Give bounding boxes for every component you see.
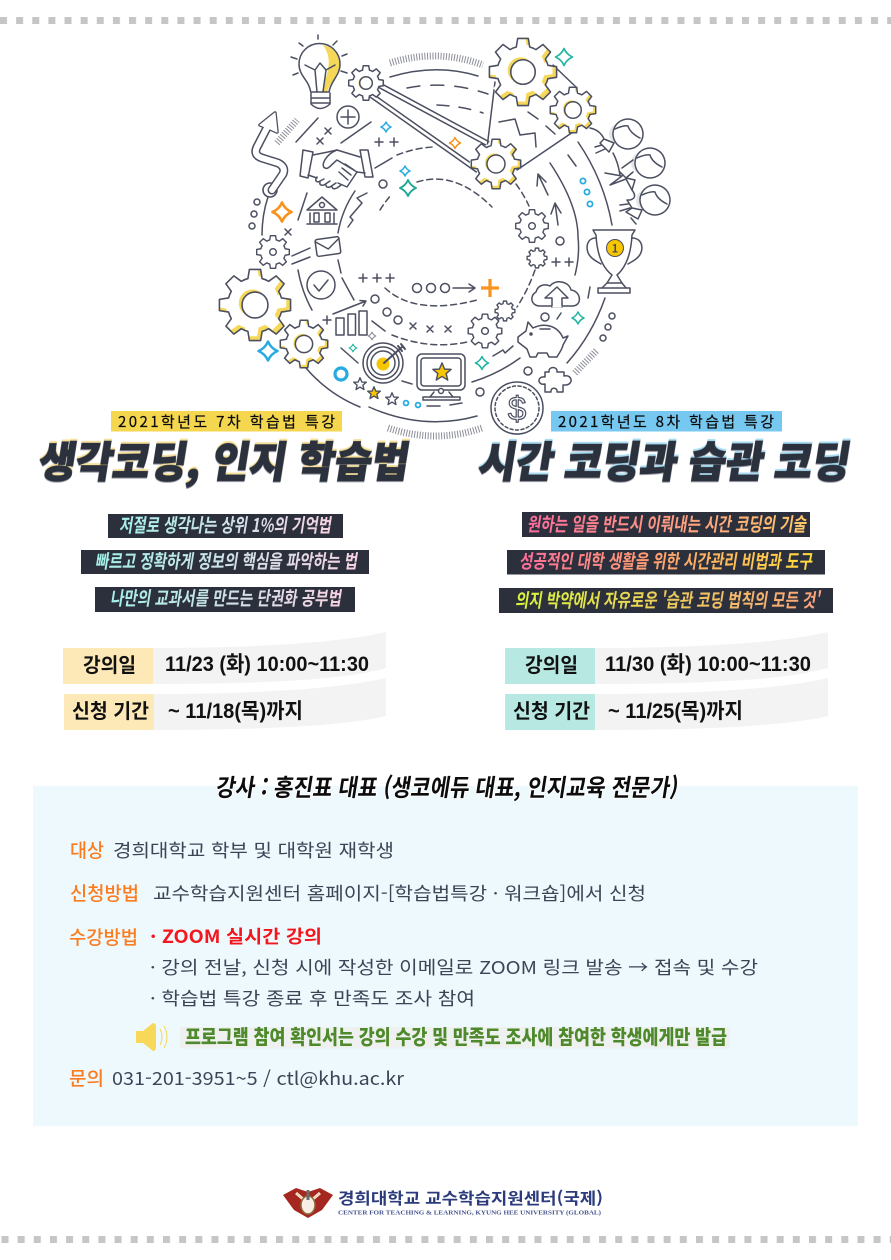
how to attend — [69, 923, 758, 1011]
illustration: circular ring of business and study icons — [217, 35, 674, 436]
target audience: 대상 — [70, 836, 104, 863]
gear: medium left — [279, 319, 328, 368]
application period row: 신청 기간 — [513, 695, 590, 724]
left schedule table — [63, 632, 386, 730]
right title: 시간 코딩과 습관 코딩 — [475, 429, 856, 490]
left lecture badge: 2021학년도 7차 학습법 특강 — [118, 411, 335, 432]
application period row: 신청 기간 — [72, 695, 149, 724]
subtitle bar 3: 나만의 교과서를 만드는 단권화 공부법 — [109, 583, 344, 611]
up arrows — [537, 174, 561, 225]
marks: crosses and pluses — [285, 128, 573, 332]
person 1 — [590, 115, 647, 153]
lecture date row — [505, 632, 828, 684]
icon: trophy — [587, 230, 642, 293]
icon: check mark — [307, 271, 335, 299]
icon: winding arrow — [256, 113, 284, 197]
coin dollar sign: $ — [508, 390, 526, 427]
left title: 생각코딩, 인지 학습법 — [35, 429, 415, 490]
application period row: ~ 11/18(목)까지 — [168, 700, 303, 723]
contact: 031-201-3951~5 / ctl@khu.ac.kr — [112, 1065, 405, 1091]
how to apply: 신청방법 — [70, 879, 139, 906]
target audience: 경희대학교 학부 및 대학원 재학생 — [113, 837, 394, 863]
how to attend: · 강의 전날, 신청 시에 작성한 이메일로 ZOOM 링크 발송 → 접속 및 수강 — [150, 954, 758, 980]
contact: 문의 — [69, 1064, 104, 1091]
number circles and arrow to plus — [412, 279, 499, 297]
icon: rising bar chart — [333, 300, 367, 335]
gear linkage rods — [370, 65, 577, 176]
icon: target with dart — [363, 343, 405, 383]
right subtitle bars — [499, 509, 833, 613]
application period row: ~ 11/25(목)까지 — [608, 700, 743, 723]
icon: bank building — [307, 197, 337, 224]
person 3 — [620, 181, 674, 224]
panel: programme details — [33, 786, 858, 1126]
lecture date row: 강의일 — [83, 649, 136, 678]
application period row — [64, 678, 386, 730]
icon: blue ring — [335, 368, 347, 380]
gear: small top left — [349, 66, 383, 100]
left subtitle bars — [81, 510, 369, 612]
plain outline gears — [257, 210, 548, 348]
subtitle bar 1: 원하는 일을 반드시 이뤄내는 시간 코딩의 기술 — [526, 509, 809, 537]
how to apply: 교수학습지원센터 홈페이지-[학습법특강 · 워크숍]에서 신청 — [153, 880, 646, 906]
lecture date row: 11/30 (화) 10:00~11:30 — [605, 653, 811, 676]
person 2 — [605, 144, 669, 190]
icon: handshake — [300, 150, 373, 189]
hatched arcs — [277, 56, 597, 436]
logo: English name: CENTER FOR TEACHING & LEARNING, KYUNG HEE UNIVERSITY (GLOBAL) — [338, 1210, 601, 1216]
gear: medium top right — [549, 86, 596, 133]
gear: centre — [470, 138, 521, 189]
right schedule table — [505, 632, 828, 730]
lecture date row — [63, 632, 386, 684]
logo: university emblem — [283, 1188, 333, 1218]
gear: large top right — [487, 36, 557, 106]
how to attend: · 학습법 특강 종료 후 만족도 조사 참여 — [150, 985, 475, 1011]
gear: large left — [217, 267, 291, 341]
icon: envelope — [315, 236, 341, 257]
lecture date row: 11/23 (화) 10:00~11:30 — [165, 653, 369, 676]
outline stars — [354, 378, 398, 405]
icon: puzzle piece — [539, 368, 571, 392]
icon: three people — [590, 115, 674, 224]
arcs and dashes forming the ring — [262, 70, 612, 422]
subtitle bar 1: 저절로 생각나는 상위 1%의 기억법 — [118, 510, 334, 538]
right lecture badge: 2021학년도 8차 학습법 특강 — [558, 411, 774, 432]
subtitle bar 2: 빠르고 정확하게 정보의 핵심을 파악하는 법 — [94, 546, 360, 574]
small circles — [249, 180, 615, 396]
icon: speaker — [136, 1023, 167, 1051]
icon: plus in circle — [337, 106, 359, 128]
logo: centre name: 경희대학교 교수학습지원센터(국제) — [338, 1185, 603, 1209]
sparkle stars — [258, 48, 584, 370]
instructor heading: 강사 : 홍진표 대표 (생코에듀 대표, 인지교육 전문가) — [214, 768, 681, 803]
icon: dollar coin — [491, 382, 543, 434]
icon: piggy bank — [518, 322, 568, 357]
lecture date row: 강의일 — [525, 649, 578, 678]
blue dots — [404, 178, 593, 407]
trophy medal number: 1 — [612, 240, 618, 256]
application period row — [505, 678, 828, 730]
icon: cloud upload — [532, 282, 579, 307]
icon: light bulb — [291, 35, 347, 108]
certificate notice: 프로그램 참여 확인서는 강의 수강 및 만족도 조사에 참여한 학생에게만 발급 — [185, 1021, 727, 1050]
icon: monitor with star — [417, 354, 465, 400]
how to attend: · ZOOM 실시간 강의 — [150, 923, 322, 949]
how to attend: 수강방법 — [69, 923, 138, 950]
